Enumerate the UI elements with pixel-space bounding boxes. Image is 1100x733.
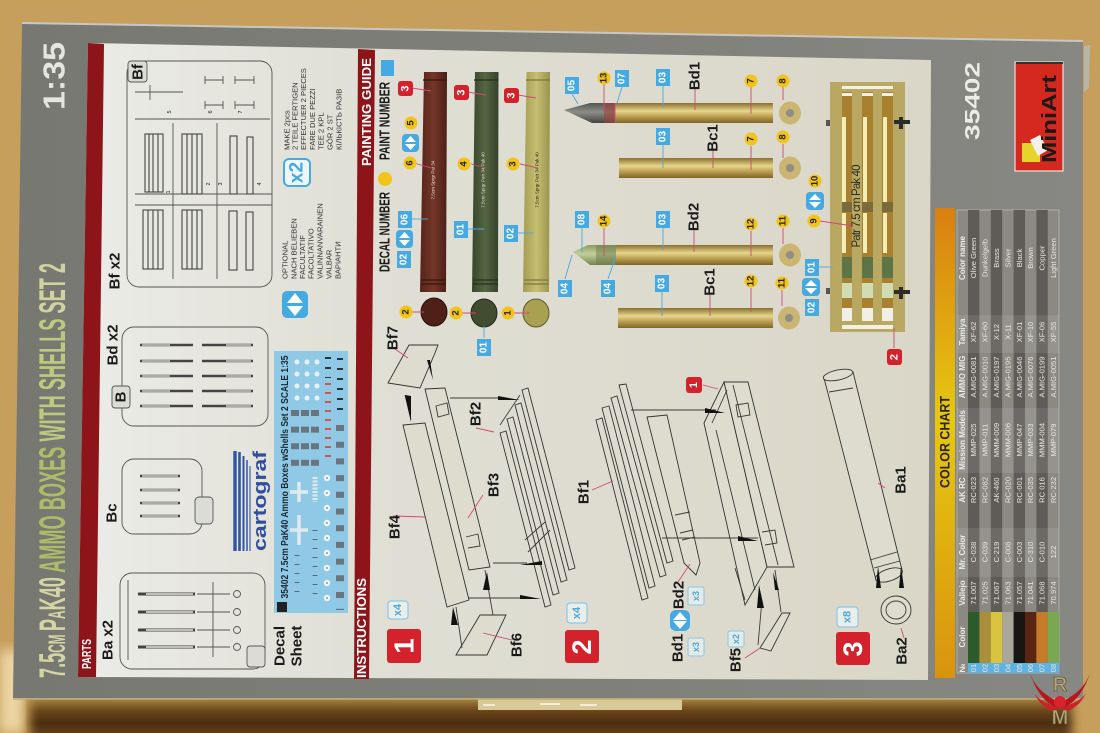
row 07: 71.068 (1038, 581, 1047, 605)
panel: sprue Bf: 5 (167, 110, 173, 114)
instruction step 2: x2 (731, 634, 741, 644)
row 05 (1015, 249, 1024, 605)
heading band: painting guide and instructions: INSTRUCTIONS (355, 578, 369, 678)
decal sheet label: Decal (272, 626, 288, 666)
row 08: Light Green (1049, 238, 1058, 278)
part Bf3 (425, 388, 490, 570)
number cells: 05 (1015, 664, 1024, 672)
row 08: XF-55 (1049, 322, 1058, 342)
tube callouts: 3 (400, 85, 412, 92)
row 03: X-12 (992, 324, 1001, 340)
optional icon and legend: NACH BELIEBEN (290, 218, 298, 279)
shell Bd2: 08 (576, 214, 588, 225)
row 01 (969, 238, 978, 605)
wooden ammo crate: 2 (888, 354, 900, 360)
part Bf7 (388, 345, 438, 388)
row 04: MMM-006 (1003, 423, 1012, 457)
row 07: MMM-004 (1038, 423, 1047, 457)
product number: 35402 (962, 62, 984, 140)
instruction step 1: Bf3 (486, 473, 502, 497)
shell Bd2: 04 (602, 283, 614, 294)
cartograf logo: cartograf (250, 450, 270, 551)
heading band: parts (78, 43, 104, 677)
instruction step 1: Bf7 (384, 326, 402, 350)
heading band: parts: PARTS (80, 639, 94, 669)
table header: AMMO MIG (958, 356, 967, 398)
row 02: 71.025 (981, 581, 990, 605)
row 04: RC-020 (1003, 477, 1012, 503)
panel: sprue Bc (104, 459, 213, 534)
row 02: RC-082 (981, 477, 990, 503)
panel: sprue Bf: 4 (257, 182, 263, 186)
tube callouts: 06 (400, 214, 410, 225)
optional icon and legend: OPTIONAL (280, 241, 290, 279)
row 05: A.MIG-0046 (1015, 357, 1024, 397)
wooden ammo crate: 9 (808, 218, 820, 224)
watermark: RM winged emblem: R (1053, 674, 1068, 696)
row 03: 71.067 (992, 581, 1001, 605)
tube callouts: 02 (398, 254, 410, 265)
tube callouts: 5 (406, 120, 416, 126)
row 05: RC-001 (1015, 477, 1024, 503)
tube callouts (396, 81, 520, 356)
make two icon and legend: FARE DUE PEZZI (308, 88, 317, 150)
shell Bd1: 05 (566, 80, 578, 91)
optional icon and legend: VALBAR (324, 249, 334, 279)
row 08: RC-232 (1049, 477, 1058, 503)
instruction step 3 (822, 367, 911, 665)
tube callouts: 1 (502, 310, 514, 316)
cartograf logo (235, 450, 270, 551)
make two icon and legend: TEE 2 KPL (316, 112, 326, 150)
instruction step 3: 3 (838, 641, 868, 657)
instruction step 2: x4 (571, 606, 583, 619)
row 03: AK-460 (992, 477, 1001, 503)
wooden ammo crate (802, 82, 910, 365)
table header: № (958, 663, 967, 672)
shell Bd2: Bd2 (686, 203, 702, 231)
decal sheet label: Sheet (288, 626, 306, 666)
row 07: XF-06 (1038, 322, 1047, 342)
watermark: RM winged emblem (1030, 673, 1090, 729)
panel: sprue Bf: Bf (130, 63, 146, 80)
optional icon and legend: FACULTATIF (298, 235, 307, 279)
ammo tube: olive green: 7.5cm Sprgr Patr 34 Pak 40 (480, 152, 486, 208)
row 06: RC-035 (1026, 477, 1035, 503)
row 07: C-010 (1038, 542, 1047, 562)
part Ba1 (824, 372, 902, 580)
optional icon and legend: FACOLTATIVO (306, 228, 316, 279)
instruction step 1: 1 (388, 638, 420, 654)
row 03: MMM-009 (992, 423, 1001, 457)
panel: sprue Bc: Bc (104, 503, 120, 523)
make two icon and legend: КІЛЬКІСТЬ РАЗІВ (334, 89, 344, 150)
color chart table (957, 210, 1059, 673)
row 08: A.MIG-0051 (1049, 357, 1058, 397)
instruction step 2: Bd2 (670, 581, 688, 609)
tube callouts: 01 (456, 224, 466, 235)
color chart heading band: COLOR CHART (938, 395, 952, 488)
row 08: 70.974 (1049, 581, 1058, 605)
row 06: XF-10 (1026, 322, 1035, 342)
shell Bc1 upper: Bc1 (704, 124, 722, 152)
shell Bd2 (558, 203, 801, 297)
row 03: A.MIG-0197 (992, 357, 1001, 397)
panel: sprue Bd: B (112, 391, 130, 402)
shell Bd2: 04 (560, 283, 570, 294)
row 01: 71.007 (969, 581, 978, 605)
color chart heading band (935, 208, 955, 678)
instruction step 2: 2 (567, 639, 597, 655)
row 06: MMP-033 (1026, 424, 1035, 456)
row 02: MMP-011 (981, 424, 990, 456)
wooden ammo crate: Patr 7.5 cm Pak 40 (851, 164, 863, 248)
number cells: 08 (1049, 664, 1058, 672)
make two icon and legend: MAKE 2pcs (282, 110, 292, 150)
shell and tube insert (647, 415, 700, 575)
row 01: C-038 (969, 542, 978, 562)
row 06: A.MIG-0076 (1026, 357, 1035, 397)
table header: Mr. Color (958, 535, 967, 569)
heading band: painting guide and instructions: PAINTING GUIDE (360, 58, 374, 166)
row 04 (1003, 248, 1012, 605)
table header: Color name (958, 235, 967, 280)
row 05: C-003 (1015, 542, 1024, 562)
ammo tube: dunkelgelb (514, 72, 550, 327)
tube callouts: 3 (456, 89, 468, 96)
panel: instruction sheet (78, 43, 931, 680)
painting guide legend: PAINT NUMBER (376, 82, 394, 160)
instruction step 1: Bf4 (386, 514, 404, 539)
table header: Vallejo (958, 580, 967, 606)
shell Bd1: 03 (658, 72, 668, 83)
panel: sprue Ba (100, 573, 265, 669)
instruction step 1: Bf2 (468, 402, 484, 426)
shell Bc1 lower: 03 (656, 278, 668, 289)
row 01: Olive Green (969, 238, 978, 278)
panel: sprue Bf: 2 (206, 182, 212, 186)
make two icon and legend: GÖR 2 ST (326, 114, 334, 150)
panel: sprue Bf: 7 (238, 110, 244, 114)
decal sheet label (272, 626, 306, 666)
number cells (968, 663, 1059, 673)
instruction step 2: Bf1 (576, 480, 592, 504)
row 05: 71.057 (1015, 581, 1024, 605)
table header: Mission Models (958, 410, 967, 470)
number cells: 01 (969, 664, 978, 672)
row 03: Brass (992, 248, 1001, 268)
row 01: MMP-025 (969, 424, 978, 456)
number cells: 03 (992, 664, 1001, 672)
instruction step 1: Bf6 (508, 633, 526, 657)
instruction step 3: Ba1 (892, 466, 910, 494)
decal sheet (274, 351, 348, 613)
panel: sprue Bf: 6 (208, 110, 214, 114)
number cells: 07 (1038, 664, 1047, 672)
instruction step 1: x4 (392, 603, 404, 616)
shell Bc1 upper: 8 (778, 134, 788, 140)
MiniArt logo: MiniArt (1039, 75, 1061, 163)
row 07: Copper (1038, 245, 1047, 270)
row 07 (1038, 245, 1047, 605)
row 06: 71.041 (1026, 581, 1035, 605)
row 04: Silver (1003, 248, 1012, 268)
color swatches (968, 612, 1059, 663)
wooden ammo crate: 02 (806, 302, 818, 313)
row 01: A.MIG-0081 (969, 357, 978, 397)
make two icon and legend (282, 68, 344, 186)
row 04: A.MIG-0195 (1003, 357, 1012, 397)
instruction step 2 (565, 377, 794, 672)
panel: sprue Bd (104, 325, 268, 426)
shell Bd1: 13 (598, 73, 610, 83)
row 08 (1049, 238, 1058, 605)
ammo tube: brown: 7.5cm Sprgr Pat 34 (430, 160, 436, 199)
tube callouts: 2 (450, 310, 462, 316)
wooden ammo crate: 01 (806, 262, 818, 273)
shell Bd1: 8 (778, 78, 788, 84)
row 02: C-039 (981, 542, 990, 562)
part Bf4 (403, 423, 469, 607)
tube callouts: 01 (478, 342, 490, 353)
row 02: XF-60 (981, 322, 990, 342)
optional icon and legend: VALINNANVARAINEN (316, 203, 324, 279)
panel: sprue Bf (106, 61, 272, 289)
shell Bd1 (564, 62, 801, 124)
table header: Tamiya (958, 318, 967, 345)
make two icon and legend: EFFECTUER 2 PIECES (299, 68, 308, 150)
shell Bc1 upper: 7 (746, 136, 756, 142)
tube callouts: 2 (400, 309, 412, 315)
optional icon and legend (280, 203, 342, 318)
table header (958, 235, 967, 672)
painting guide legend (376, 60, 394, 272)
row 04: C-008 (1003, 542, 1012, 562)
optional icon and legend: ВАРІАНТИ (334, 241, 342, 279)
shell Bd1: 7 (746, 78, 756, 84)
row 06: C-310 (1026, 542, 1035, 562)
shell Bc1 lower: 12 (746, 276, 756, 286)
watermark: RM winged emblem: M (1052, 707, 1068, 729)
row 05: XF-01 (1015, 322, 1024, 342)
title: 7.5CM PAK40 AMMO BOXES WITH SHELLS SET 2 (32, 263, 73, 678)
part Bf5 (760, 613, 790, 651)
shell Bc1 upper: 03 (658, 131, 668, 142)
shell Bd2: 11 (778, 215, 788, 226)
row 07: RC 016 (1038, 477, 1047, 503)
instruction step 3: Ba2 (894, 637, 910, 665)
decal sheet: 35402 7.5cm PaK40 Ammo Boxes wShells Set 2 SCALE 1:35 (279, 355, 291, 598)
part Ba2 (881, 596, 911, 624)
panel: sprue Bd: Bd x2 (104, 325, 122, 365)
row 01: XF-62 (969, 322, 978, 342)
tube callouts: 3 (508, 161, 518, 167)
shell Bd1: Bd1 (686, 62, 704, 90)
row 04: 71.063 (1003, 581, 1012, 605)
shell Bc1 lower (618, 268, 800, 330)
shell Bd2: 14 (598, 215, 610, 226)
part Bf6 (456, 615, 506, 655)
row 03 (992, 248, 1001, 605)
make two icon and legend: 2 TEILE FERTIGEN (290, 82, 300, 150)
tube callouts: 6 (404, 160, 416, 166)
row 06: Brown (1026, 247, 1035, 269)
table header: AK RC (958, 477, 967, 503)
row 02 (981, 239, 990, 605)
shell Bc1 upper (619, 124, 801, 180)
row 03: C-219 (992, 542, 1001, 562)
row 05: Black (1015, 249, 1024, 267)
instruction step 1 (384, 326, 575, 663)
part Bf1 slats (596, 384, 673, 600)
instruction step 2: Bd1 (670, 634, 686, 662)
painting guide legend: DECAL NUMBER (376, 192, 394, 272)
instruction step 3: x8 (842, 611, 854, 623)
MiniArt logo (1015, 62, 1063, 171)
tube callouts: 02 (506, 228, 516, 239)
tube callouts: 4 (458, 161, 470, 167)
instruction step 2: x3 (691, 591, 701, 601)
row 08: 122 (1049, 546, 1058, 558)
shell Bd2: 03 (658, 214, 668, 225)
panel: sprue Bf: 1 (166, 190, 172, 194)
row 07: A.MIG-0199 (1038, 357, 1047, 397)
row 02: Dunkelgelb (981, 239, 990, 277)
ammo tube: olive green (462, 72, 498, 338)
table header: Color (958, 627, 967, 647)
row 01: RC-023 (969, 477, 978, 503)
ammo tube: dunkelgelb: 7.5cm Sprgr Patr 34 Pak 40 (534, 152, 540, 208)
instruction step 2: Bf5 (728, 648, 744, 672)
wooden ammo crate: 10 (810, 176, 820, 186)
shell Bd2: 12 (746, 219, 756, 229)
panel: sprue Bf: 3 (218, 182, 224, 186)
shell Bc1 lower: 11 (776, 277, 788, 288)
row 06 (1026, 247, 1035, 605)
row 08: MMP-079 (1049, 424, 1058, 456)
ammo box body (704, 382, 794, 605)
part Bf2 slats (500, 388, 575, 607)
panel: sprue Ba: Ba x2 (100, 620, 116, 660)
make two icon and legend: x2 (286, 162, 308, 183)
instruction step 2: x3 (691, 642, 701, 652)
row 05: MMP-047 (1015, 424, 1024, 456)
shell Bd1: 07 (616, 73, 628, 84)
row 02: A.MIG-0010 (981, 357, 990, 397)
ammo tube: brown (412, 72, 447, 326)
panel: sprue Bf: Bf x2 (106, 253, 124, 289)
scale label: 1:35 (36, 42, 72, 110)
tube callouts: 3 (506, 92, 518, 99)
instruction step 2: 1 (688, 382, 700, 388)
heading band: painting guide and instructions (354, 49, 375, 679)
row 04: X-11 (1003, 324, 1012, 340)
number cells: 06 (1026, 664, 1035, 672)
number cells: 04 (1003, 664, 1012, 672)
shell Bc1 lower: Bc1 (702, 268, 718, 296)
number cells: 02 (981, 664, 990, 672)
